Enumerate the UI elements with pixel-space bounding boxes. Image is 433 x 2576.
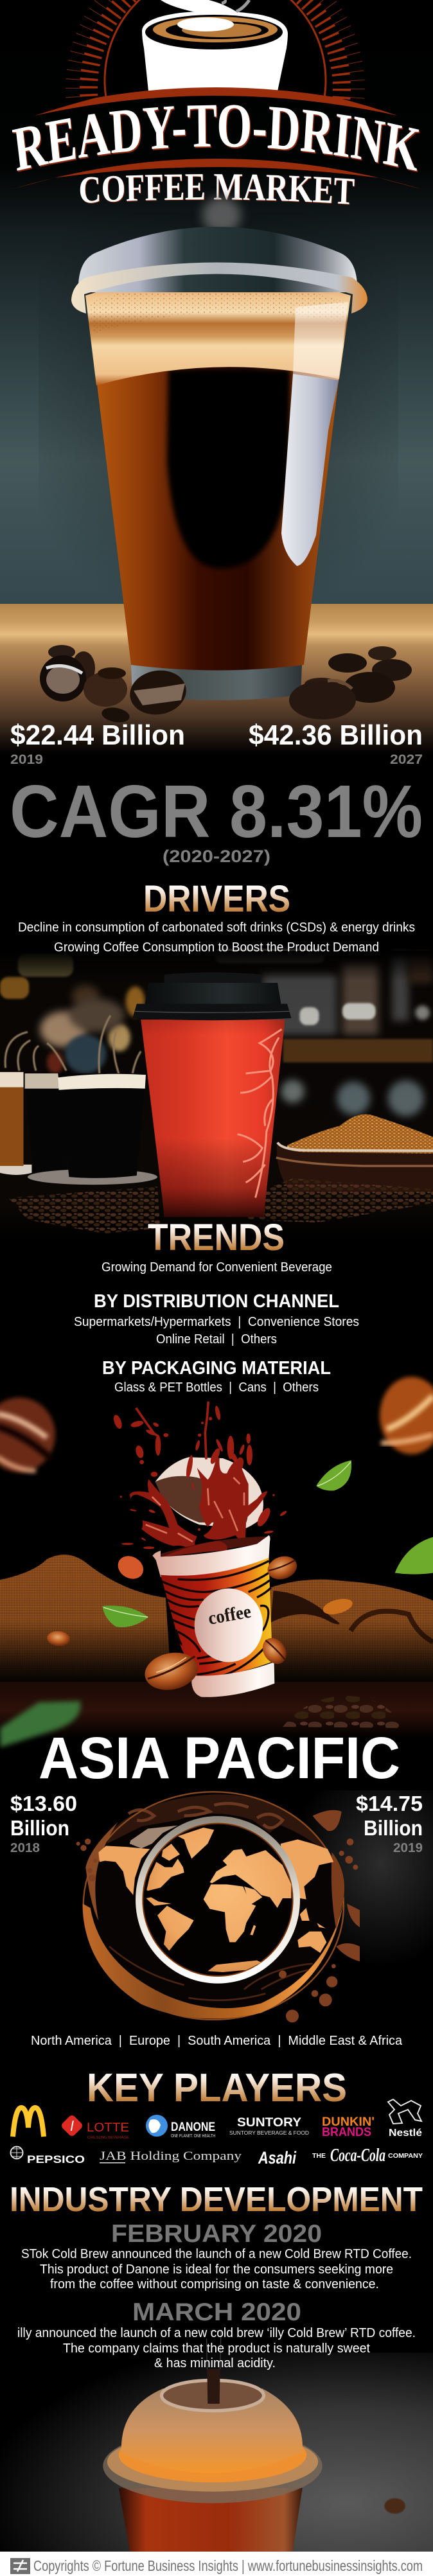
paper coffee cup	[114, 1535, 300, 1697]
stat: 2018 regional value: 2018	[10, 1841, 40, 1855]
blurred bean	[384, 2498, 405, 2514]
bean lower left	[141, 1648, 201, 1695]
main coffee cup	[71, 227, 367, 700]
other regions: North America | Europe | South America | Middle East & Africa	[31, 2034, 403, 2048]
logo: JAB Holding Company: JAB Holding Company	[100, 2149, 242, 2163]
thin straw top	[207, 2331, 221, 2369]
scene: leaves and loose beans	[46, 1460, 433, 1647]
development: March 2020: MARCH 2020	[132, 2298, 301, 2326]
dark coffee core	[167, 369, 290, 569]
glow behind map	[249, 1790, 433, 1997]
bean right	[258, 1634, 291, 1668]
development: February 2020: from the coffee without comprising on taste & convenience.	[50, 2277, 379, 2291]
coffee surface in cup	[163, 1540, 227, 1557]
lid rim	[132, 1004, 291, 1020]
cup glass base	[131, 665, 302, 700]
logo: McDonald's	[13, 2108, 44, 2137]
bright crescent	[83, 1895, 345, 2018]
dome opening	[161, 2380, 264, 2411]
segment: by packaging material: BY PACKAGING MATERIAL	[102, 1358, 331, 1379]
splash highlights	[146, 1478, 244, 1542]
stat: 2018 regional value: Billion	[10, 1816, 69, 1840]
lid collar	[103, 2429, 323, 2503]
coffee body	[96, 366, 339, 671]
hero background	[0, 0, 433, 755]
cup body	[141, 1019, 285, 1217]
scene: black cups on left	[0, 1072, 157, 1185]
development: March 2020	[17, 2298, 416, 2370]
scene: burlap sack	[0, 1555, 433, 1686]
foam speckles	[90, 281, 347, 334]
scene: scattered beans	[8, 1178, 433, 1233]
ornate swirls	[128, 1803, 283, 1828]
bean left	[114, 1551, 148, 1584]
glass body	[119, 2488, 303, 2552]
development: February 2020: STok Cold Brew announced the launch of a new Cold Brew RTD Coffee.	[21, 2247, 412, 2261]
development: February 2020: FEBRUARY 2020	[111, 2220, 322, 2248]
trends text: Growing Demand for Convenient Beverage	[102, 1260, 332, 1275]
world map cup	[76, 1792, 360, 2022]
ornate crust top	[107, 1794, 330, 1855]
arctic islands	[130, 1826, 178, 1848]
title: Ready-To-Drink: READY-TO-DRINK	[12, 105, 420, 172]
lid middle	[145, 983, 281, 1005]
cup shading	[141, 1019, 285, 1217]
stat: 2019 regional value	[356, 1792, 423, 1855]
logo: Coca-Cola Company: COMPANY	[388, 2153, 423, 2160]
logo: sunburst rays and arc	[66, 0, 365, 100]
logo: PepsiCo	[10, 2146, 85, 2166]
splash column	[197, 1457, 268, 1544]
scene: wooden table	[0, 1682, 433, 1747]
lid top	[164, 972, 261, 983]
bean upper right	[265, 1553, 300, 1583]
lid rim	[71, 262, 367, 313]
logo: PepsiCo: PEPSICO	[27, 2153, 85, 2166]
scene: bowl of coffee grounds	[276, 1114, 433, 1192]
heading: Drivers: DRIVERS	[143, 878, 290, 920]
drivers text: Growing Coffee Consumption to Boost the Product Demand	[54, 940, 379, 955]
stat: 2019 market value: $22.44 Billion	[10, 719, 185, 751]
stat: 2019 regional value: $14.75	[356, 1792, 423, 1815]
logo: Lotte	[60, 2114, 129, 2140]
logo: lower banner	[11, 159, 423, 195]
development: February 2020	[21, 2220, 412, 2291]
stat: 2019 market value	[10, 719, 185, 767]
coffee inside cup	[155, 1537, 270, 1559]
segment: by distribution channel: Supermarkets/Hypermarkets | Convenience Stores	[74, 1315, 359, 1329]
development: March 2020: & has minimal acidity.	[154, 2356, 276, 2370]
foam layer	[85, 275, 351, 385]
coffee bean pile	[283, 1696, 403, 1728]
logo: Nestle	[388, 2099, 422, 2139]
logo: Dunkin' Brands	[322, 2115, 375, 2139]
logo: Danone: ONE PLANET. ONE HEALTH	[171, 2133, 215, 2139]
label disc	[195, 1589, 263, 1662]
droplets left	[112, 1408, 168, 1549]
translucent highlight on foam	[293, 302, 348, 380]
logo: Coca-Cola Company: Coca-Cola	[330, 2145, 385, 2166]
droplets top and right	[185, 1402, 287, 1534]
icon: steam above cup	[202, 197, 241, 233]
logo: Danone	[146, 2115, 215, 2139]
continents outside rim	[98, 1839, 333, 1953]
logo: Coca-Cola Company: THE	[312, 2153, 326, 2160]
segment: by packaging material	[102, 1358, 331, 1395]
coffee beans right	[289, 646, 412, 719]
stat: 2019 regional value: Billion	[364, 1816, 423, 1840]
splash arm	[130, 1479, 197, 1553]
stat: 2019 regional value: 2019	[393, 1841, 423, 1855]
cup upper white	[152, 1535, 270, 1578]
stat: 2027 market value: $42.36 Billion	[249, 719, 423, 751]
logo: Lotte: CHILSUNG BEVERAGE	[87, 2136, 129, 2140]
right ornate edge	[331, 1852, 344, 1929]
black swirls	[162, 1561, 271, 1678]
logo: Suntory: SUNTORY BEVERAGE & FOOD	[229, 2130, 309, 2136]
scene: cafe background	[0, 949, 433, 1248]
segment: by distribution channel	[74, 1291, 359, 1346]
stat: 2027 market value	[249, 719, 423, 767]
stat: 2027 market value: 2027	[390, 752, 423, 767]
dark saucer	[84, 1792, 343, 2019]
segment: by distribution channel: Online Retail | Others	[156, 1332, 277, 1346]
left ornate edge	[85, 1822, 118, 1921]
heading: Key Players: KEY PLAYERS	[87, 2066, 347, 2110]
copper ring	[84, 1792, 344, 2020]
stat: 2019 market value: 2019	[10, 752, 43, 767]
stat: 2018 regional value	[10, 1792, 77, 1855]
heading: Asia Pacific: ASIA PACIFIC	[39, 1725, 400, 1791]
drivers text	[18, 921, 415, 955]
red paper cup with black lid	[132, 972, 291, 1217]
logo: Dunkin' Brands: BRANDS	[322, 2126, 371, 2139]
logo: Suntory: SUNTORY	[237, 2116, 301, 2130]
logo: coffee cup	[142, 0, 288, 91]
logo: Nestle: Nestlé	[389, 2128, 422, 2139]
development: March 2020: illy announced the launch of a new cold brew ‘illy Cold Brew’ RTD coffee.	[17, 2326, 416, 2340]
blurred leaf	[0, 1701, 80, 1747]
lid outside	[155, 1457, 263, 1529]
cup interior	[143, 1824, 293, 1976]
title: Coffee Market: COFFEE MARKET	[80, 174, 355, 205]
white cup rim	[136, 1816, 300, 1984]
logo: Asahi: Asahi	[258, 2148, 296, 2167]
floor background	[0, 2352, 433, 2553]
lid dome	[78, 227, 357, 292]
segment: by distribution channel: BY DISTRIBUTION CHANNEL	[94, 1291, 339, 1312]
stat: 2018 regional value: $13.60	[10, 1792, 77, 1815]
cup label: coffee: coffee	[207, 1601, 252, 1629]
segment: by packaging material: Glass & PET Bottles | Cans | Others	[114, 1381, 319, 1395]
scene: blurred flying beans	[0, 1377, 433, 1695]
embossed pattern	[238, 1029, 281, 1197]
logo: Suntory	[229, 2116, 309, 2136]
stat: CAGR: (2020-2027)	[163, 847, 270, 866]
logo: Lotte: l	[71, 2118, 75, 2134]
footer logo	[10, 2558, 30, 2574]
drivers text: Decline in consumption of carbonated soft drinks (CSDs) & energy drinks	[18, 921, 415, 935]
lower swirl lines	[109, 1946, 313, 2000]
bubbles	[76, 1810, 360, 2022]
silver highlight	[281, 374, 339, 566]
continents inside rim	[146, 1828, 291, 1972]
scene: iced coffee cup	[0, 2331, 433, 2553]
lid ring	[107, 2432, 318, 2492]
logo: Lotte: LOTTE	[87, 2121, 129, 2135]
coffee beans left	[40, 645, 190, 725]
lid orange ring	[119, 2427, 306, 2482]
straw	[207, 2369, 220, 2404]
logo: upper banner	[35, 87, 398, 116]
footer	[0, 2552, 433, 2576]
lid underside	[155, 1476, 248, 1522]
logo: Danone: DANONE	[171, 2121, 215, 2134]
development: March 2020: The company claims that the product is naturally sweet	[63, 2342, 370, 2356]
dome	[121, 2388, 303, 2473]
logo: Dunkin' Brands: DUNKIN'	[322, 2115, 375, 2129]
development: February 2020: This product of Danone is ideal for the consumers seeking more	[40, 2263, 393, 2277]
lower white band	[191, 1662, 274, 1697]
scene fade	[0, 951, 433, 1253]
printed band	[161, 1558, 272, 1677]
flying lid and coffee splash	[112, 1402, 287, 1553]
heading: Trends: TRENDS	[148, 1217, 285, 1258]
